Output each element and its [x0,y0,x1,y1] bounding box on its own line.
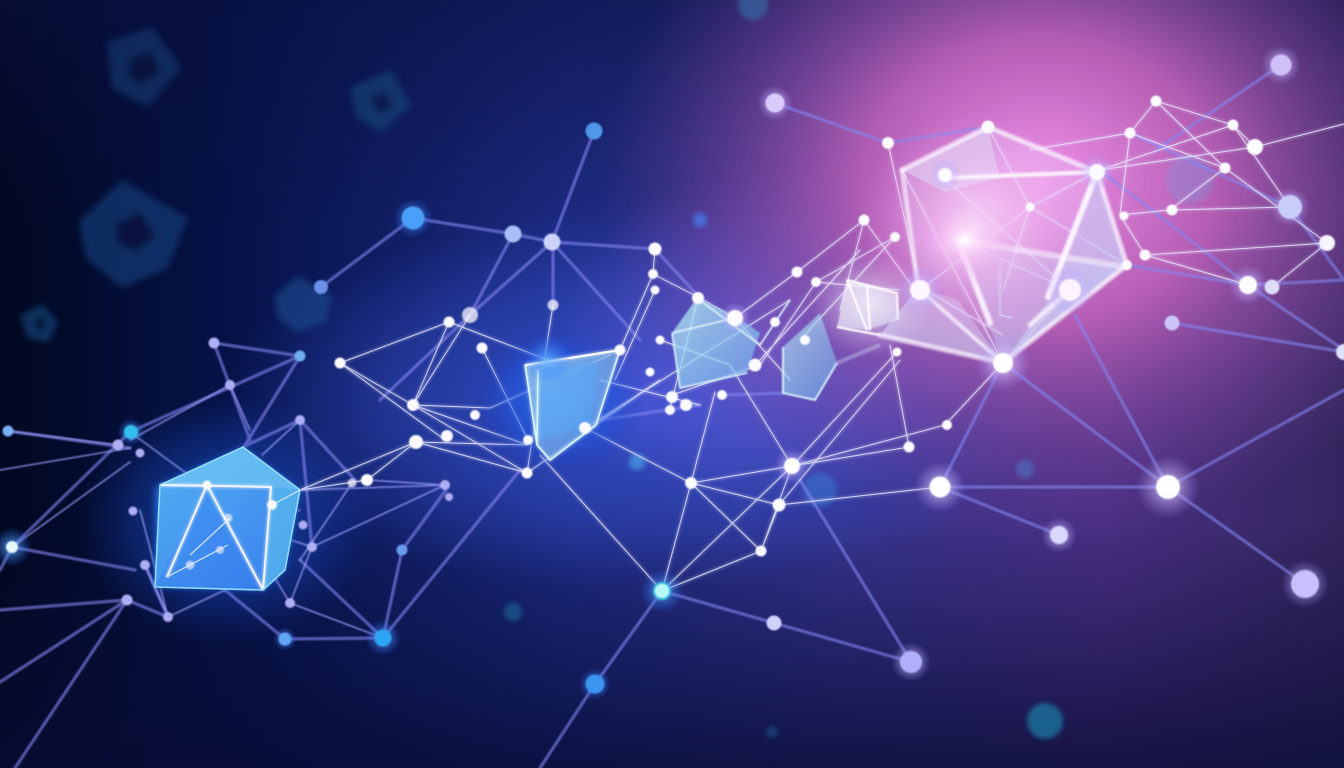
crystal: third cube [672,298,790,388]
network lines: lilac thin links, left cluster [0,385,449,638]
nodes: small bright dots [186,96,1238,570]
crystal: second cube [475,325,645,475]
blurred background dots [504,0,1214,739]
blurred background cubes [20,27,411,342]
network lines: thin bright links [300,101,1344,591]
nodes: dim lilac dots [6,338,453,622]
crystal: left blue cube [155,447,300,590]
crystal: large glowing polyhedron [855,110,1127,363]
crystal: fifth cube [810,253,934,357]
crystal: fourth cube [783,313,880,400]
